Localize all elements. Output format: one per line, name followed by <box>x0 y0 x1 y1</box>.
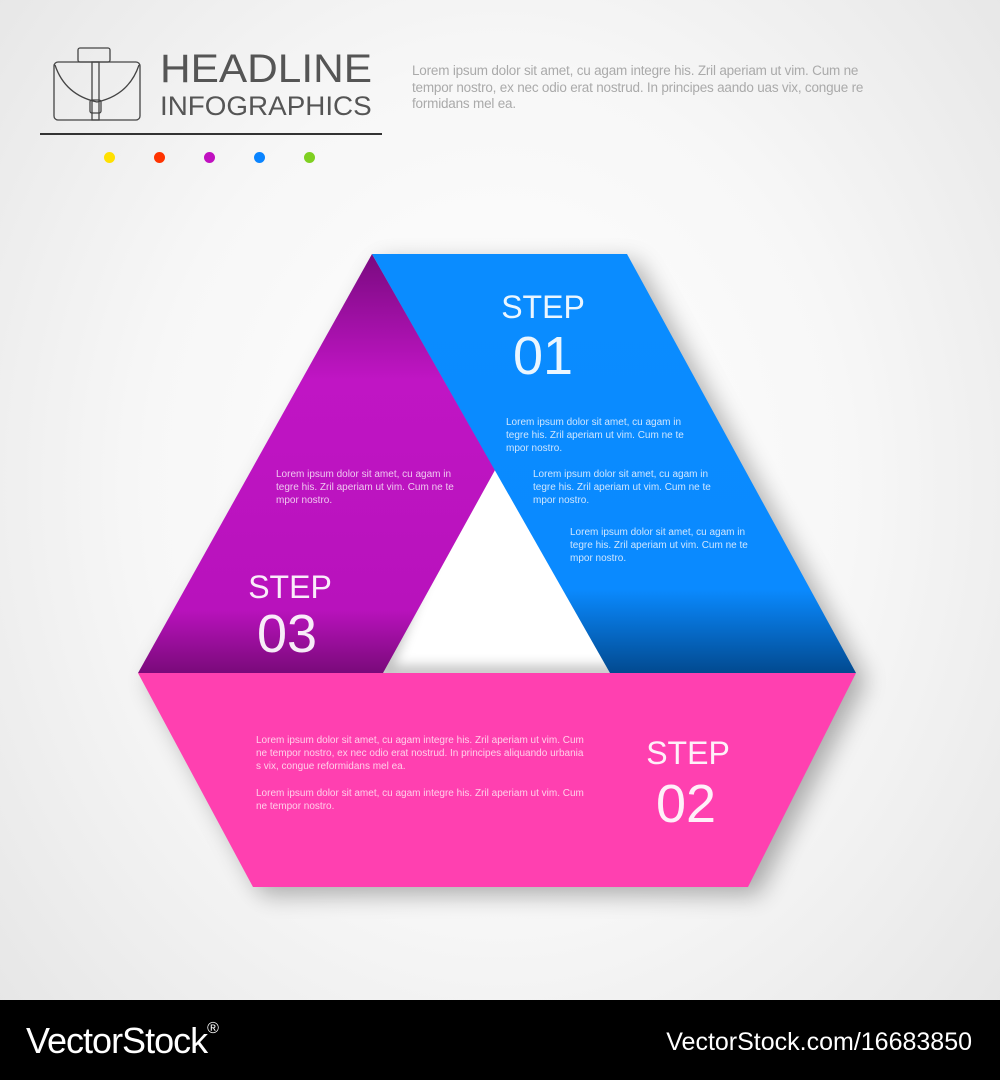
panel: step 01 blue: 01 <box>513 326 573 386</box>
panel: step 01 blue: Lorem ipsum dolor sit amet, cu agam in <box>533 469 708 480</box>
color dots <box>104 152 315 163</box>
panel: step 02 pink: ne tempor nostro, ex nec odio erat nostrud. In principes aliquando urbania <box>256 748 584 759</box>
triangle diagram <box>138 248 876 909</box>
title <box>160 47 372 121</box>
header text: tempor nostro, ex nec odio erat nostrud. In principes aando uas vix, congue re <box>412 80 863 94</box>
panel: step 01 blue: tegre his. Zril aperiam ut vim. Cum ne te <box>506 430 684 441</box>
panel: step 03 purple: Lorem ipsum dolor sit amet, cu agam in <box>276 469 451 480</box>
footer bar <box>0 1000 1000 1080</box>
panel: step 01 blue <box>372 254 856 673</box>
panel: step 02 pink: Lorem ipsum dolor sit amet, cu agam integre his. Zril aperiam ut vim. Cum <box>256 735 584 746</box>
panel: step 01 blue: STEP <box>501 289 585 325</box>
panel: step 03 purple: mpor nostro. <box>276 495 332 506</box>
panel: step 01 blue: mpor nostro. <box>570 553 626 564</box>
panel: step 02 pink: 02 <box>656 774 716 834</box>
panel: step 03 purple: 03 <box>257 604 317 664</box>
header divider <box>40 133 382 135</box>
panel: step 02 pink: ne tempor nostro. <box>256 801 334 812</box>
panel: step 02 pink: STEP <box>646 735 730 771</box>
title: INFOGRAPHICS <box>160 91 372 121</box>
header text <box>412 63 863 111</box>
panel: step 02 pink: s vix, congue reformidans mel ea. <box>256 761 406 772</box>
panel: step 02 pink <box>138 673 856 887</box>
panel: step 01 blue: Lorem ipsum dolor sit amet, cu agam in <box>570 527 745 538</box>
panel: step 01 blue: mpor nostro. <box>533 495 589 506</box>
header icon: briefcase <box>53 47 141 121</box>
panel: step 03 purple <box>138 254 495 673</box>
panel: step 02 pink: Lorem ipsum dolor sit amet, cu agam integre his. Zril aperiam ut vim. Cum <box>256 788 584 799</box>
footer bar: VectorStock.com/16683850 <box>666 1028 972 1056</box>
panel: step 01 blue: Lorem ipsum dolor sit amet, cu agam in <box>506 417 681 428</box>
panel: step 03 purple: STEP <box>248 569 332 605</box>
header text: Lorem ipsum dolor sit amet, cu agam integre his. Zril aperiam ut vim. Cum ne <box>412 63 858 78</box>
header text: formidans mel ea. <box>412 96 516 111</box>
title: HEADLINE <box>160 47 372 91</box>
panel: step 01 blue: tegre his. Zril aperiam ut vim. Cum ne te <box>570 540 748 551</box>
footer bar: VectorStock® <box>26 1020 218 1061</box>
panel: step 01 blue: mpor nostro. <box>506 443 562 454</box>
panel: step 03 purple: tegre his. Zril aperiam ut vim. Cum ne te <box>276 482 454 493</box>
panel: step 01 blue: tegre his. Zril aperiam ut vim. Cum ne te <box>533 482 711 493</box>
